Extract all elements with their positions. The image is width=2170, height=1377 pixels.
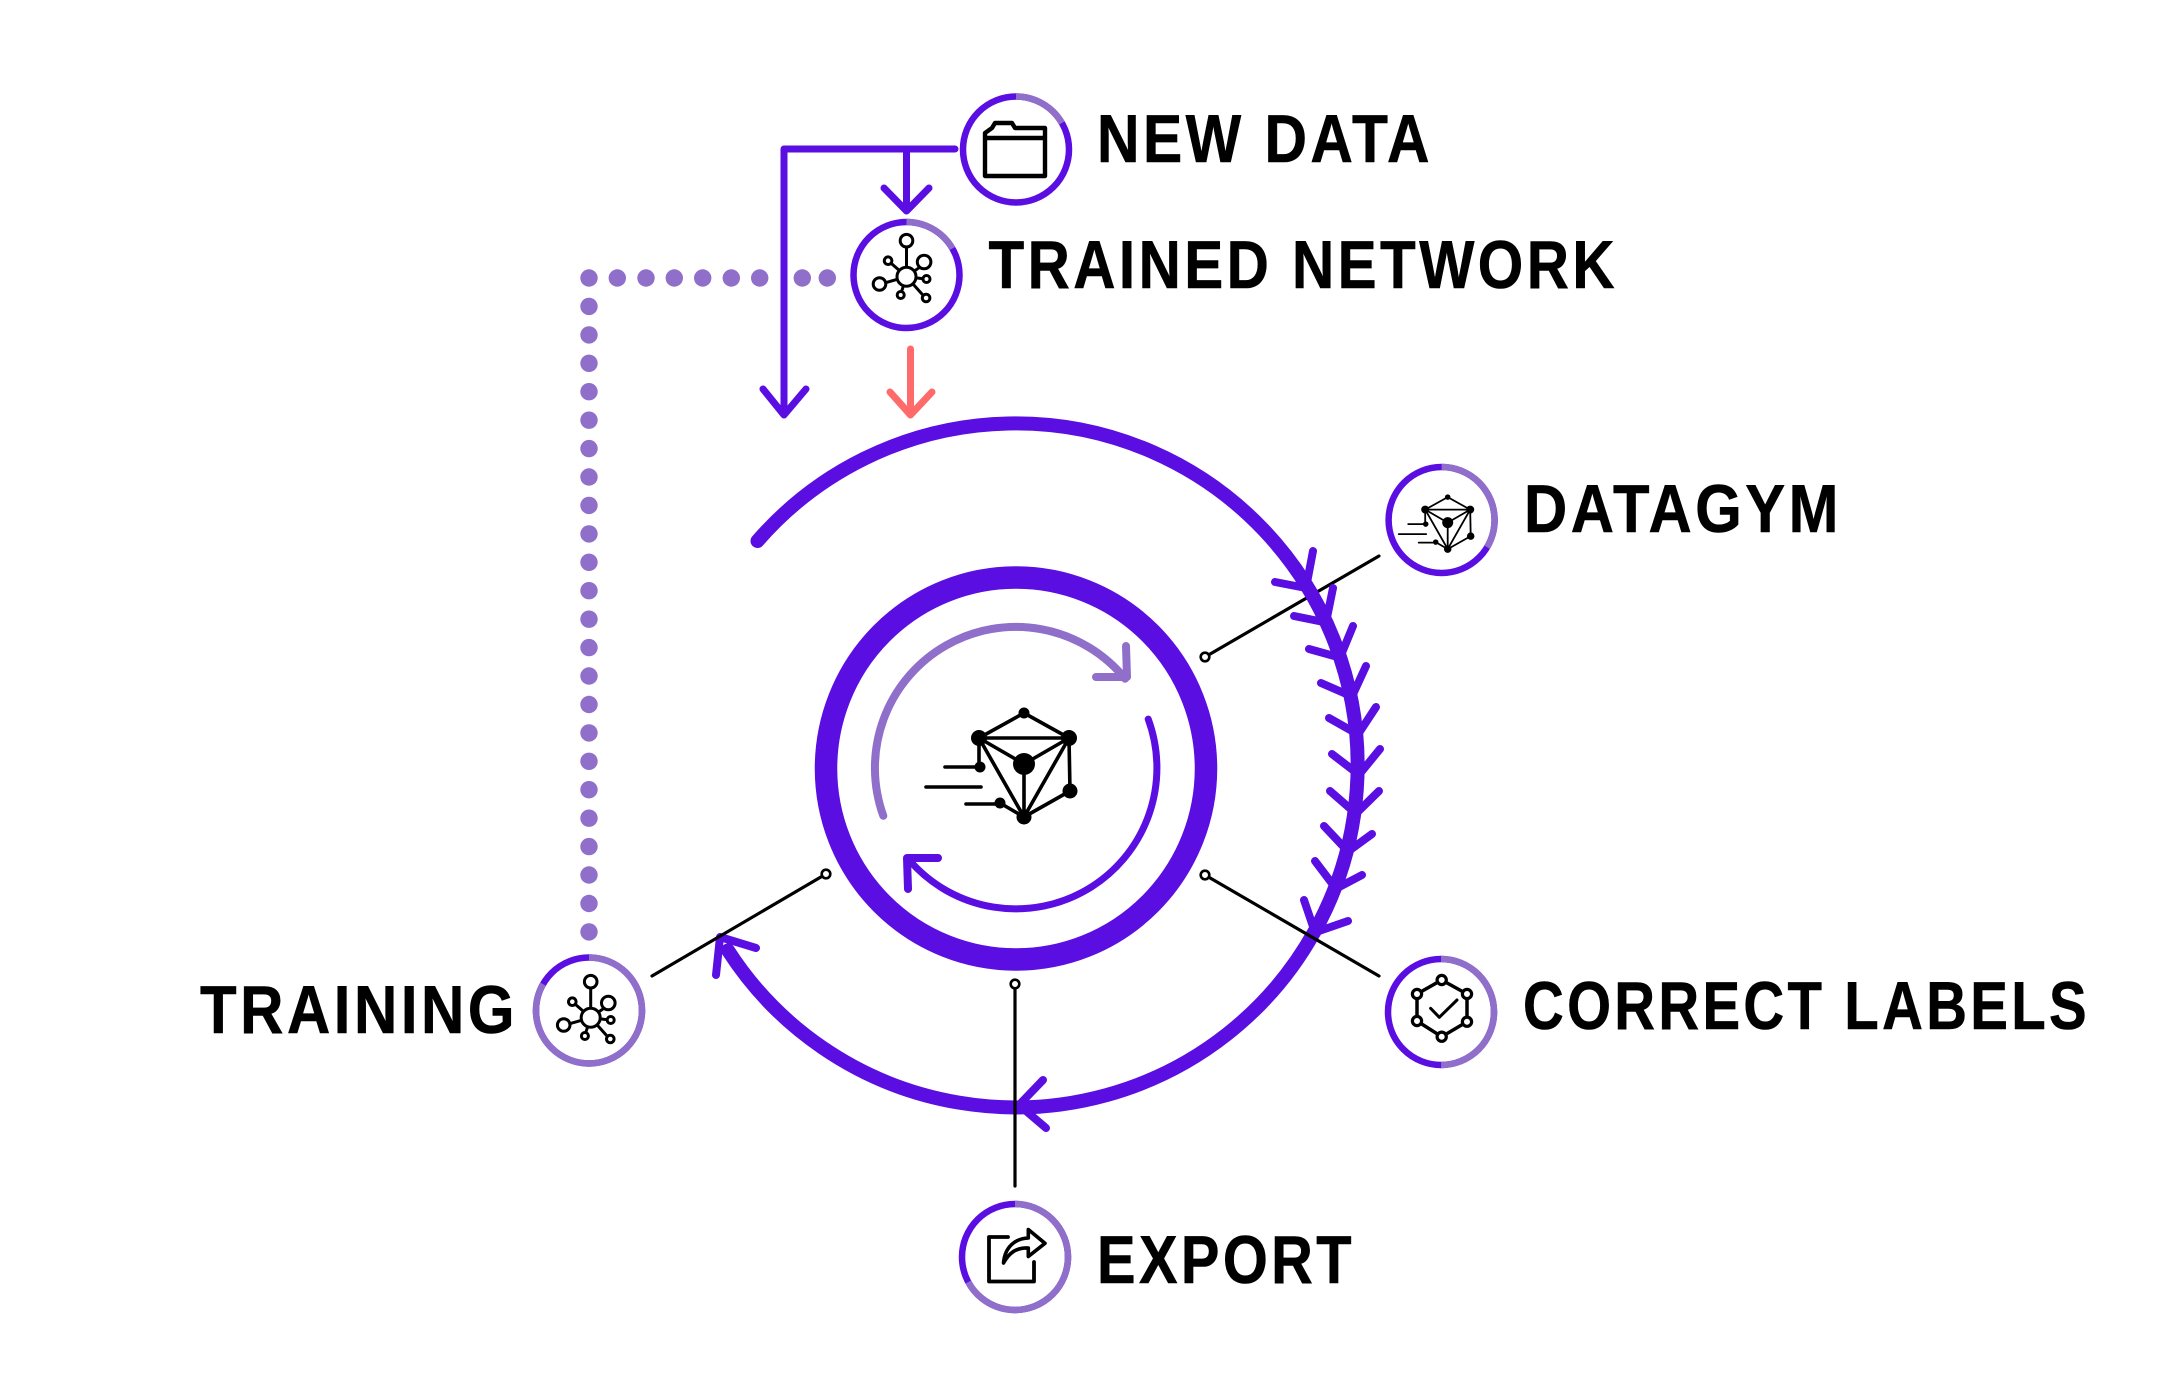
red arrow from trained network	[890, 349, 932, 415]
connector line: training	[652, 870, 830, 976]
inner dark arc with arrow	[907, 719, 1157, 909]
central thick ring	[826, 578, 1206, 960]
node: correct labels	[1388, 959, 1494, 1065]
connector line: datagym	[1201, 556, 1379, 661]
dotted feedback line from trained network to training	[580, 269, 836, 941]
label: datagym: DATAGYM	[1524, 471, 1842, 547]
label: training: TRAINING	[200, 972, 518, 1048]
node: datagym	[1389, 467, 1495, 573]
connector line: correct labels	[1201, 871, 1379, 976]
label: new data: NEW DATA	[1097, 101, 1433, 177]
arrows from new data	[763, 149, 955, 415]
node: new data	[963, 96, 1069, 202]
node: trained network	[854, 222, 960, 328]
label: export: EXPORT	[1097, 1222, 1355, 1298]
node: training	[536, 958, 642, 1064]
outer cycle arc with arrows	[716, 423, 1380, 1128]
inner light arc with arrow	[875, 627, 1127, 816]
connector line: export	[1011, 980, 1019, 1186]
icon: central datagym cube	[926, 708, 1078, 824]
label: trained network: TRAINED NETWORK	[988, 227, 1618, 303]
node: export	[962, 1204, 1068, 1310]
